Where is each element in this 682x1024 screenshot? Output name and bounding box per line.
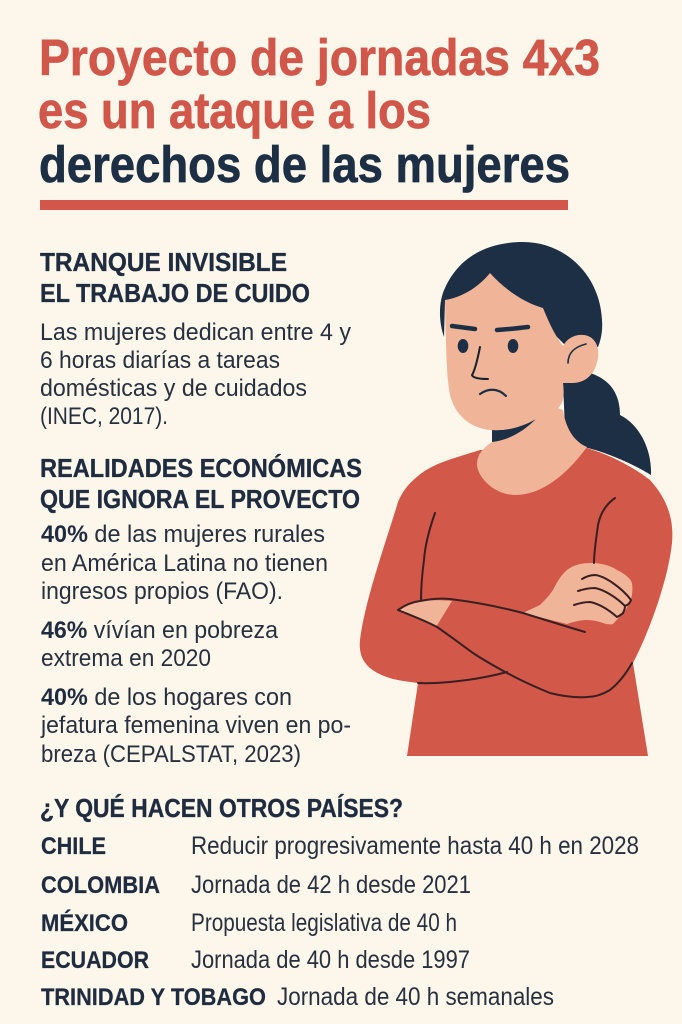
title: derechos de las mujeres <box>39 136 570 193</box>
heading: otros paises: ¿Y QUÉ HACEN OTROS PAÍSES? <box>40 793 403 823</box>
chin shadow <box>492 419 536 442</box>
title <box>38 29 600 193</box>
row: Colombia <box>41 871 471 899</box>
shirt <box>360 448 672 756</box>
heading: tranque invisible <box>40 247 310 308</box>
row: Trinidad y Tobago: TRINIDAD Y TOBAGO <box>41 984 266 1011</box>
row: Mexico: MÉXICO <box>41 909 128 937</box>
row: Ecuador: Jornada de 40 h desde 1997 <box>191 946 470 974</box>
text block: cuidados: domésticas y de cuidados <box>40 375 307 402</box>
heading: tranque invisible: EL TRABAJO DE CUIDO <box>40 278 310 308</box>
text block: cuidados <box>40 319 351 430</box>
stat: 46% pobreza: extrema en 2020 <box>41 645 211 672</box>
stat: 40% rurales: ingresos propios (FAO). <box>41 578 283 605</box>
nose <box>472 347 488 379</box>
stat: 40% hogares: breza (CEPALSTAT, 2023) <box>41 741 301 768</box>
neck <box>477 400 587 495</box>
text block: cuidados: 6 horas diarías a tareas <box>40 347 280 374</box>
stat: 40% hogares: jefatura femenina viven en po- <box>40 712 351 739</box>
row: Chile <box>41 832 639 860</box>
section: otros paises <box>40 793 639 1011</box>
row: Trinidad y Tobago: Jornada de 40 h semanales <box>277 983 554 1011</box>
title underline bar <box>40 200 568 210</box>
row: Mexico <box>41 909 457 937</box>
row: Ecuador <box>41 946 470 974</box>
row: Colombia: COLOMBIA <box>41 872 160 899</box>
row: Mexico: Propuesta legislativa de 40 h <box>191 909 457 937</box>
illustration: woman with crossed arms <box>360 242 672 756</box>
stat: 40% rurales: 40% de las mujeres rurales <box>41 521 325 548</box>
heading: tranque invisible: TRANQUE INVISIBLE <box>40 247 287 277</box>
eyes <box>458 339 518 353</box>
ear line <box>568 344 586 363</box>
eyebrows <box>452 326 528 330</box>
stat: 40% rurales: en América Latina no tienen <box>41 550 328 577</box>
stat: 46% pobreza: 46% vívían en pobreza <box>41 617 279 644</box>
finger lines <box>574 575 631 617</box>
ponytail <box>563 373 651 475</box>
stat: 40% hogares <box>40 684 351 768</box>
mouth <box>480 390 506 396</box>
arm and body lines <box>398 498 632 697</box>
stat: 40% hogares: 40% de los hogares con <box>41 684 292 711</box>
row: Chile: Reducir progresivamente hasta 40 h en 2028 <box>191 832 639 860</box>
heading: realidades economicas: QUE IGNORA EL PROVECTO <box>40 484 360 514</box>
heading: realidades economicas: REALIDADES ECONÓMICAS <box>40 453 362 483</box>
section: realidades economicas <box>40 453 362 768</box>
section: tranque invisible <box>40 247 351 430</box>
row: Colombia: Jornada de 42 h desde 2021 <box>191 871 471 899</box>
stat: 46% pobreza <box>41 617 279 672</box>
row: Ecuador: ECUADOR <box>41 947 149 974</box>
title: es un ataque a los <box>38 82 431 139</box>
heading: realidades economicas <box>40 453 362 514</box>
row: Chile: CHILE <box>41 833 106 860</box>
hand <box>523 563 632 624</box>
forearm skin <box>398 600 452 627</box>
row: Trinidad y Tobago <box>41 983 554 1011</box>
title: Proyecto de jornadas 4x3 <box>39 29 600 86</box>
ear <box>563 335 598 383</box>
text block: cuidados: Las mujeres dedican entre 4 y <box>40 319 351 346</box>
face <box>445 273 564 430</box>
hair <box>440 242 602 347</box>
stat: 40% rurales <box>41 521 328 605</box>
text block: cuidados: (INEC, 2017). <box>40 403 168 430</box>
